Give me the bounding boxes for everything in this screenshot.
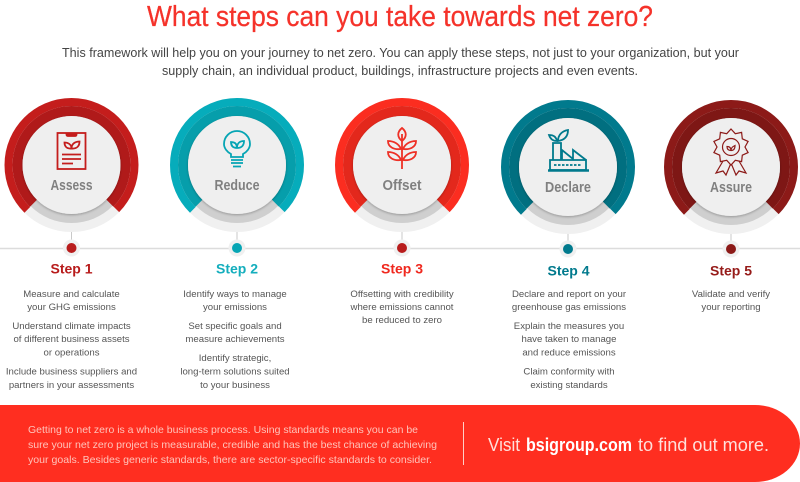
circle badge: assess [0,76,161,254]
intro text: This framework will help you on your journey to net zero. You can apply these steps, not just to your organization, but your [62,45,740,60]
label: Offset: Offset [382,178,422,194]
step 1 text: of different business assets [13,334,130,345]
step 3 text [350,289,454,326]
step 1 text [6,289,137,391]
icon: factory with leaf [548,130,589,170]
label: Declare: Declare [545,180,591,196]
step 4 text: greenhouse gas emissions [512,302,626,313]
panel: step 5 assure [642,78,800,313]
step 4 text [512,289,627,391]
label: Assure: Assure [710,180,752,196]
step 2 text: long-term solutions suited [180,366,290,378]
panel: step 3 offset [313,76,491,326]
footer text: your goals. Besides generic standards, there are sector-specific standards to consider. [28,454,432,466]
step 3 text: where emissions cannot [350,302,454,313]
step 2 text: measure achievements [185,334,285,345]
panel: step 1 assess [0,76,161,391]
step 4 text: Claim conformity with [523,366,615,378]
step 1 text: Measure and calculate [23,289,120,300]
step 5 text: your reporting [701,302,761,313]
step 2 text: your emissions [203,302,267,313]
footer banner [0,405,800,482]
footer text: sure your net zero project is measurable, credible and has the best chance of achieving [28,439,437,451]
step 3 text: be reduced to zero [362,315,442,326]
footer text [28,424,437,466]
step 4 text: Declare and report on your [512,289,627,300]
stem and dot 5 [722,234,740,258]
step 1 text: Include business suppliers and [6,366,137,378]
icon: rosette with leaf [714,129,748,175]
step 2 text [180,289,290,391]
circle badge: assure [642,78,800,256]
step 1 text: Understand climate impacts [12,321,131,332]
call to action: Visit [488,435,520,455]
panel: step 2 reduce [148,76,326,391]
step 2 text: to your business [200,380,270,391]
stem and dot 4 [560,234,576,258]
icon: clipboard with leaf [58,133,86,169]
step 5 text [692,289,770,313]
stem and dot 1 [63,232,80,256]
icon: light bulb with leaf [224,131,250,166]
icon: plant sprig [388,128,416,169]
heading: step 2: Step 2 [216,260,258,276]
step 1 text: your GHG emissions [27,302,116,313]
circle badge: offset [313,76,491,254]
call to action: to find out more. [638,435,769,455]
circle badge: reduce [148,76,326,254]
step 1 text: partners in your assessments [9,380,134,391]
title: What steps can you take towards net zero? [147,1,653,33]
call to action: bsigroup.com [526,435,632,455]
step 5 text: Validate and verify [692,289,770,300]
heading: step 1: Step 1 [50,260,93,276]
label: Reduce: Reduce [214,178,260,194]
heading: step 5: Step 5 [710,262,752,278]
step 4 text: have taken to manage [522,334,616,345]
intro text: supply chain, an individual product, buildings, infrastructure projects and even events. [162,63,638,78]
step 4 text: and reduce emissions [522,348,616,358]
circle badge: declare [479,78,657,256]
step 4 text: Explain the measures you [514,321,624,332]
step 3 text: Offsetting with credibility [350,289,454,300]
step 2 text: Identify ways to manage [183,289,287,300]
heading: step 4: Step 4 [547,262,590,278]
step 2 text: Set specific goals and [188,321,282,332]
label: Assess: Assess [50,178,92,194]
footer text: Getting to net zero is a whole business process. Using standards means you can be [28,424,418,436]
step 4 text: existing standards [530,380,608,391]
step 2 text: Identify strategic, [199,353,271,364]
intro text [62,45,740,78]
panel: step 4 declare [479,78,657,391]
stem and dot 2 [228,232,246,256]
call to action [488,435,769,455]
step 1 text: or operations [44,348,100,358]
heading: step 3: Step 3 [381,260,423,276]
stem and dot 3 [394,232,410,256]
